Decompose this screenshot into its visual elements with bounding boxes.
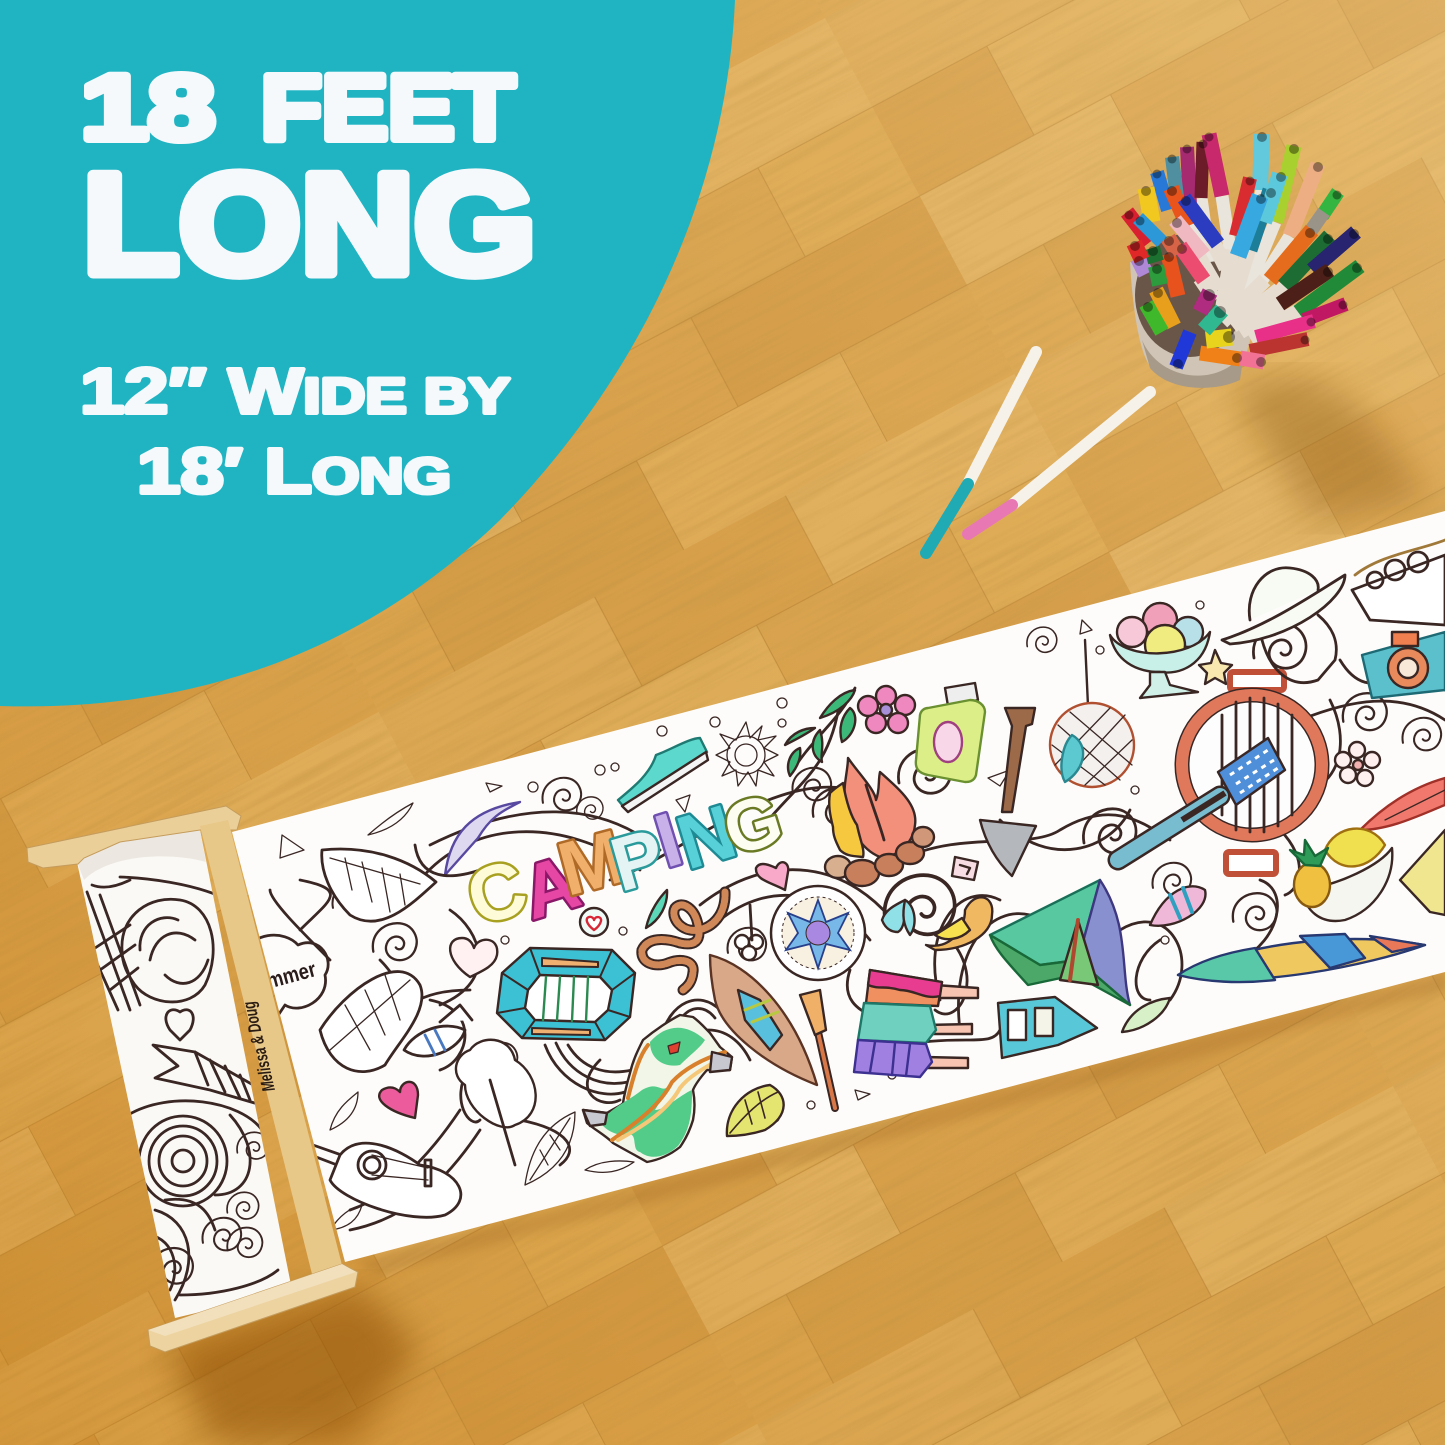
paper sheet unrolled	[232, 511, 1445, 1262]
icon: round grill with spatula	[1118, 672, 1322, 874]
icon: paddle	[800, 990, 835, 1108]
text: dimensions	[80, 355, 510, 507]
background swirls and waves	[270, 660, 1445, 1230]
icon: camera	[1362, 632, 1445, 698]
icon: popcorn	[1352, 540, 1445, 625]
heading: 18 feet long	[81, 57, 536, 304]
text: camping lettering: C	[456, 842, 537, 943]
front row of markers	[1134, 174, 1360, 367]
icon: fish	[404, 1005, 472, 1056]
coloring doodles on the paper	[239, 540, 1445, 1230]
wooden holder	[27, 806, 358, 1352]
text: camping lettering: M	[550, 814, 633, 913]
leaf: lower left	[320, 972, 422, 1072]
icon: sneaker	[618, 738, 708, 812]
top wooden bar	[27, 806, 241, 868]
spiral curls	[333, 624, 1441, 1072]
cloud: summer	[260, 934, 330, 1015]
icon: pink heart small	[756, 862, 788, 890]
icon: fish net	[1050, 640, 1134, 787]
icon: ice cream bowl	[1110, 603, 1210, 698]
icon: kayak	[710, 955, 817, 1085]
panel: teal corner badge	[0, 0, 735, 706]
wooden side rod with brand name	[200, 820, 342, 1274]
roll doodles	[82, 877, 278, 1300]
text: camping lettering: I	[646, 797, 691, 884]
icon: pink flower	[858, 686, 915, 733]
wooden side rod with brand name: Melissa & Doug	[239, 999, 279, 1094]
roll of paper	[77, 830, 292, 1318]
icon: rope	[642, 892, 725, 990]
text: camping lettering: N	[668, 789, 745, 886]
icon: guitar	[311, 1143, 461, 1217]
icon: small star	[1199, 650, 1232, 684]
text: dimensions: 12″ W IDE BY	[80, 355, 510, 427]
icon: green sprig	[785, 688, 855, 776]
text: dimensions: 18′ L ONG	[137, 435, 451, 507]
icon: motor boat	[998, 997, 1097, 1058]
text: camping lettering: P	[602, 813, 674, 908]
loose pink marker	[968, 392, 1150, 534]
icon: small green leaf	[1122, 998, 1170, 1032]
icon: small pink heart left	[450, 938, 497, 977]
icon: fruit bowl and pineapple	[1290, 829, 1392, 921]
shadows on the floor	[165, 377, 1445, 1445]
icon: tree	[456, 1040, 536, 1165]
leaf: large left	[322, 849, 436, 921]
small dots and triangles	[279, 600, 1205, 1122]
icon: small teal leaf	[646, 890, 667, 928]
icon: striped leaf	[727, 1085, 784, 1136]
icon: pink square spiral	[952, 857, 978, 880]
icon: surfboard	[1178, 934, 1425, 982]
icon: sun	[716, 722, 778, 786]
icon: trail map	[583, 1015, 732, 1162]
icon: compass mandala	[771, 886, 865, 980]
icon: striped fish	[1150, 886, 1205, 926]
icon: campfire	[825, 758, 934, 886]
loose teal marker	[926, 352, 1036, 553]
back row of markers	[1127, 134, 1338, 296]
icon: popsicles	[854, 970, 978, 1077]
icon: pink heart lower	[379, 1082, 418, 1118]
bottom wooden bar	[148, 1264, 358, 1352]
icon: water bottle	[916, 683, 985, 782]
icon: water drops	[882, 900, 915, 935]
icon: clover	[735, 905, 763, 960]
cloud: summer: mmer	[264, 956, 319, 993]
icon: heart badge	[580, 908, 608, 936]
icon: straw hat	[1222, 568, 1345, 683]
text: camping lettering: G	[715, 779, 791, 871]
icon: bird	[415, 802, 520, 876]
icon: shovel	[980, 708, 1036, 876]
icon: feather orange	[1360, 778, 1445, 830]
icon: yellow box edge	[1400, 830, 1445, 915]
heading: 18 feet long: 18	[81, 57, 215, 159]
text: camping lettering	[468, 796, 783, 922]
icon: tent	[990, 880, 1130, 1005]
marker cup	[1124, 132, 1362, 388]
heading: 18 feet long: FEET	[261, 57, 515, 159]
icon: outline leaves	[330, 803, 634, 1230]
marker tip openings	[1124, 132, 1362, 369]
icon: red flower	[1335, 742, 1380, 786]
icon: raft	[497, 948, 635, 1040]
heading: 18 feet long: LONG	[83, 145, 536, 304]
text: camping lettering: A	[512, 839, 589, 936]
icon: yellow bird	[926, 897, 992, 950]
